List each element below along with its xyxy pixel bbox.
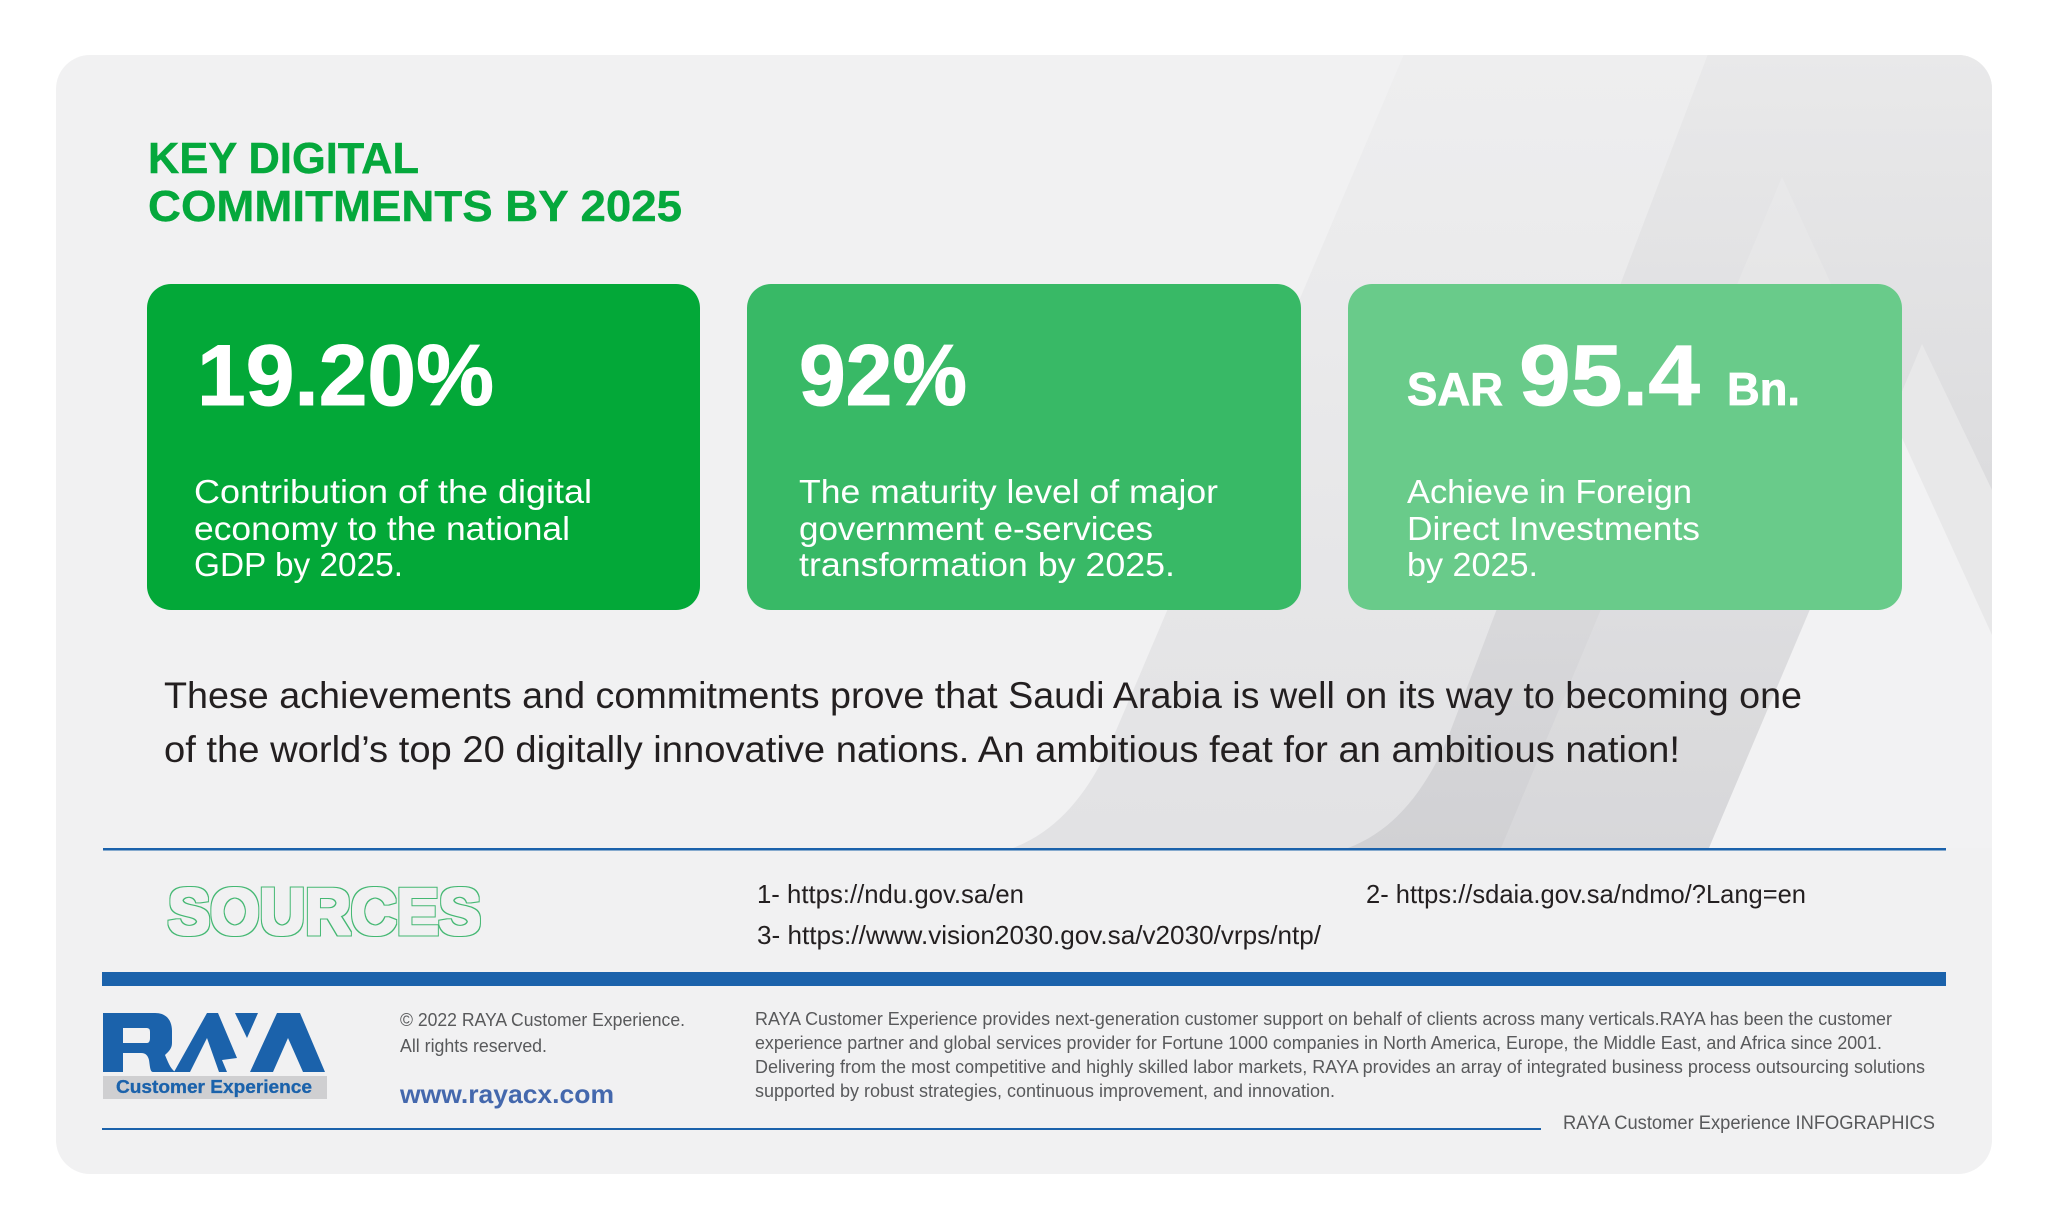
stat value: SAR bbox=[1407, 363, 1503, 415]
footer label: RAYA Customer Experience INFOGRAPHICS bbox=[1563, 1113, 1935, 1134]
panel: stat card 92% bbox=[747, 284, 1301, 610]
logo: RAYA Customer Experience bbox=[103, 1013, 327, 1099]
company description: RAYA Customer Experience provides next-generation customer support on behalf of clients across many verticals.RAYA has been the customer bbox=[755, 1009, 1892, 1029]
source links: 2- https://sdaia.gov.sa/ndmo/?Lang=en bbox=[1366, 879, 1806, 909]
paragraph: conclusion: These achievements and commitments prove that Saudi Arabia is well on its way to becoming one bbox=[164, 675, 1802, 716]
stat description: Achieve in Foreign bbox=[1407, 473, 1692, 510]
company description: supported by robust strategies, continuous improvement, and innovation. bbox=[755, 1081, 1335, 1101]
source links: 1- https://ndu.gov.sa/en bbox=[757, 879, 1024, 909]
stat description bbox=[194, 473, 592, 583]
stat description: economy to the national bbox=[194, 510, 570, 547]
stat value: Bn. bbox=[1727, 363, 1800, 415]
copyright: © 2022 RAYA Customer Experience. bbox=[400, 1009, 685, 1030]
heading: sources (outlined): SOURCES bbox=[168, 875, 481, 948]
title: KEY DIGITAL bbox=[148, 134, 419, 183]
stat description: The maturity level of major bbox=[799, 473, 1218, 510]
stat value: 19.20% bbox=[197, 328, 494, 424]
stat description bbox=[1407, 473, 1700, 583]
copyright bbox=[400, 1009, 685, 1056]
company description: experience partner and global services provider for Fortune 1000 companies in North America, Europe, the Middle East, and Africa since 2001. bbox=[755, 1033, 1882, 1053]
panel: stat card SAR 95.4 Bn. bbox=[1348, 284, 1902, 610]
stat description bbox=[799, 473, 1218, 583]
stat value bbox=[1407, 328, 1800, 424]
background watermark: stylised A bands bbox=[1013, 54, 1992, 848]
stat value: 95.4 bbox=[1519, 328, 1700, 424]
stat description: transformation by 2025. bbox=[799, 546, 1175, 583]
source links bbox=[757, 879, 1806, 950]
panel: stat card 19.20% bbox=[147, 284, 700, 610]
logo: RAYA Customer Experience: Customer Experience bbox=[116, 1077, 312, 1097]
copyright: All rights reserved. bbox=[400, 1035, 547, 1056]
stat description: GDP by 2025. bbox=[194, 546, 403, 583]
stat value: 92% bbox=[799, 328, 967, 424]
company description: Delivering from the most competitive and highly skilled labor markets, RAYA provides an array of integrated business process outsourcing solutions bbox=[755, 1057, 1925, 1077]
stat description: by 2025. bbox=[1407, 546, 1538, 583]
stat description: Direct Investments bbox=[1407, 510, 1700, 547]
website: www.rayacx.com bbox=[399, 1079, 614, 1109]
paragraph: conclusion bbox=[164, 675, 1802, 770]
stat description: Contribution of the digital bbox=[194, 473, 592, 510]
paragraph: conclusion: of the world’s top 20 digitally innovative nations. An ambitious feat for an ambitious nation! bbox=[164, 729, 1680, 770]
title: COMMITMENTS BY 2025 bbox=[148, 182, 682, 231]
stat description: government e-services bbox=[799, 510, 1153, 547]
company description bbox=[755, 1009, 1925, 1101]
title bbox=[148, 134, 682, 231]
source links: 3- https://www.vision2030.gov.sa/v2030/vrps/ntp/ bbox=[757, 920, 1322, 950]
